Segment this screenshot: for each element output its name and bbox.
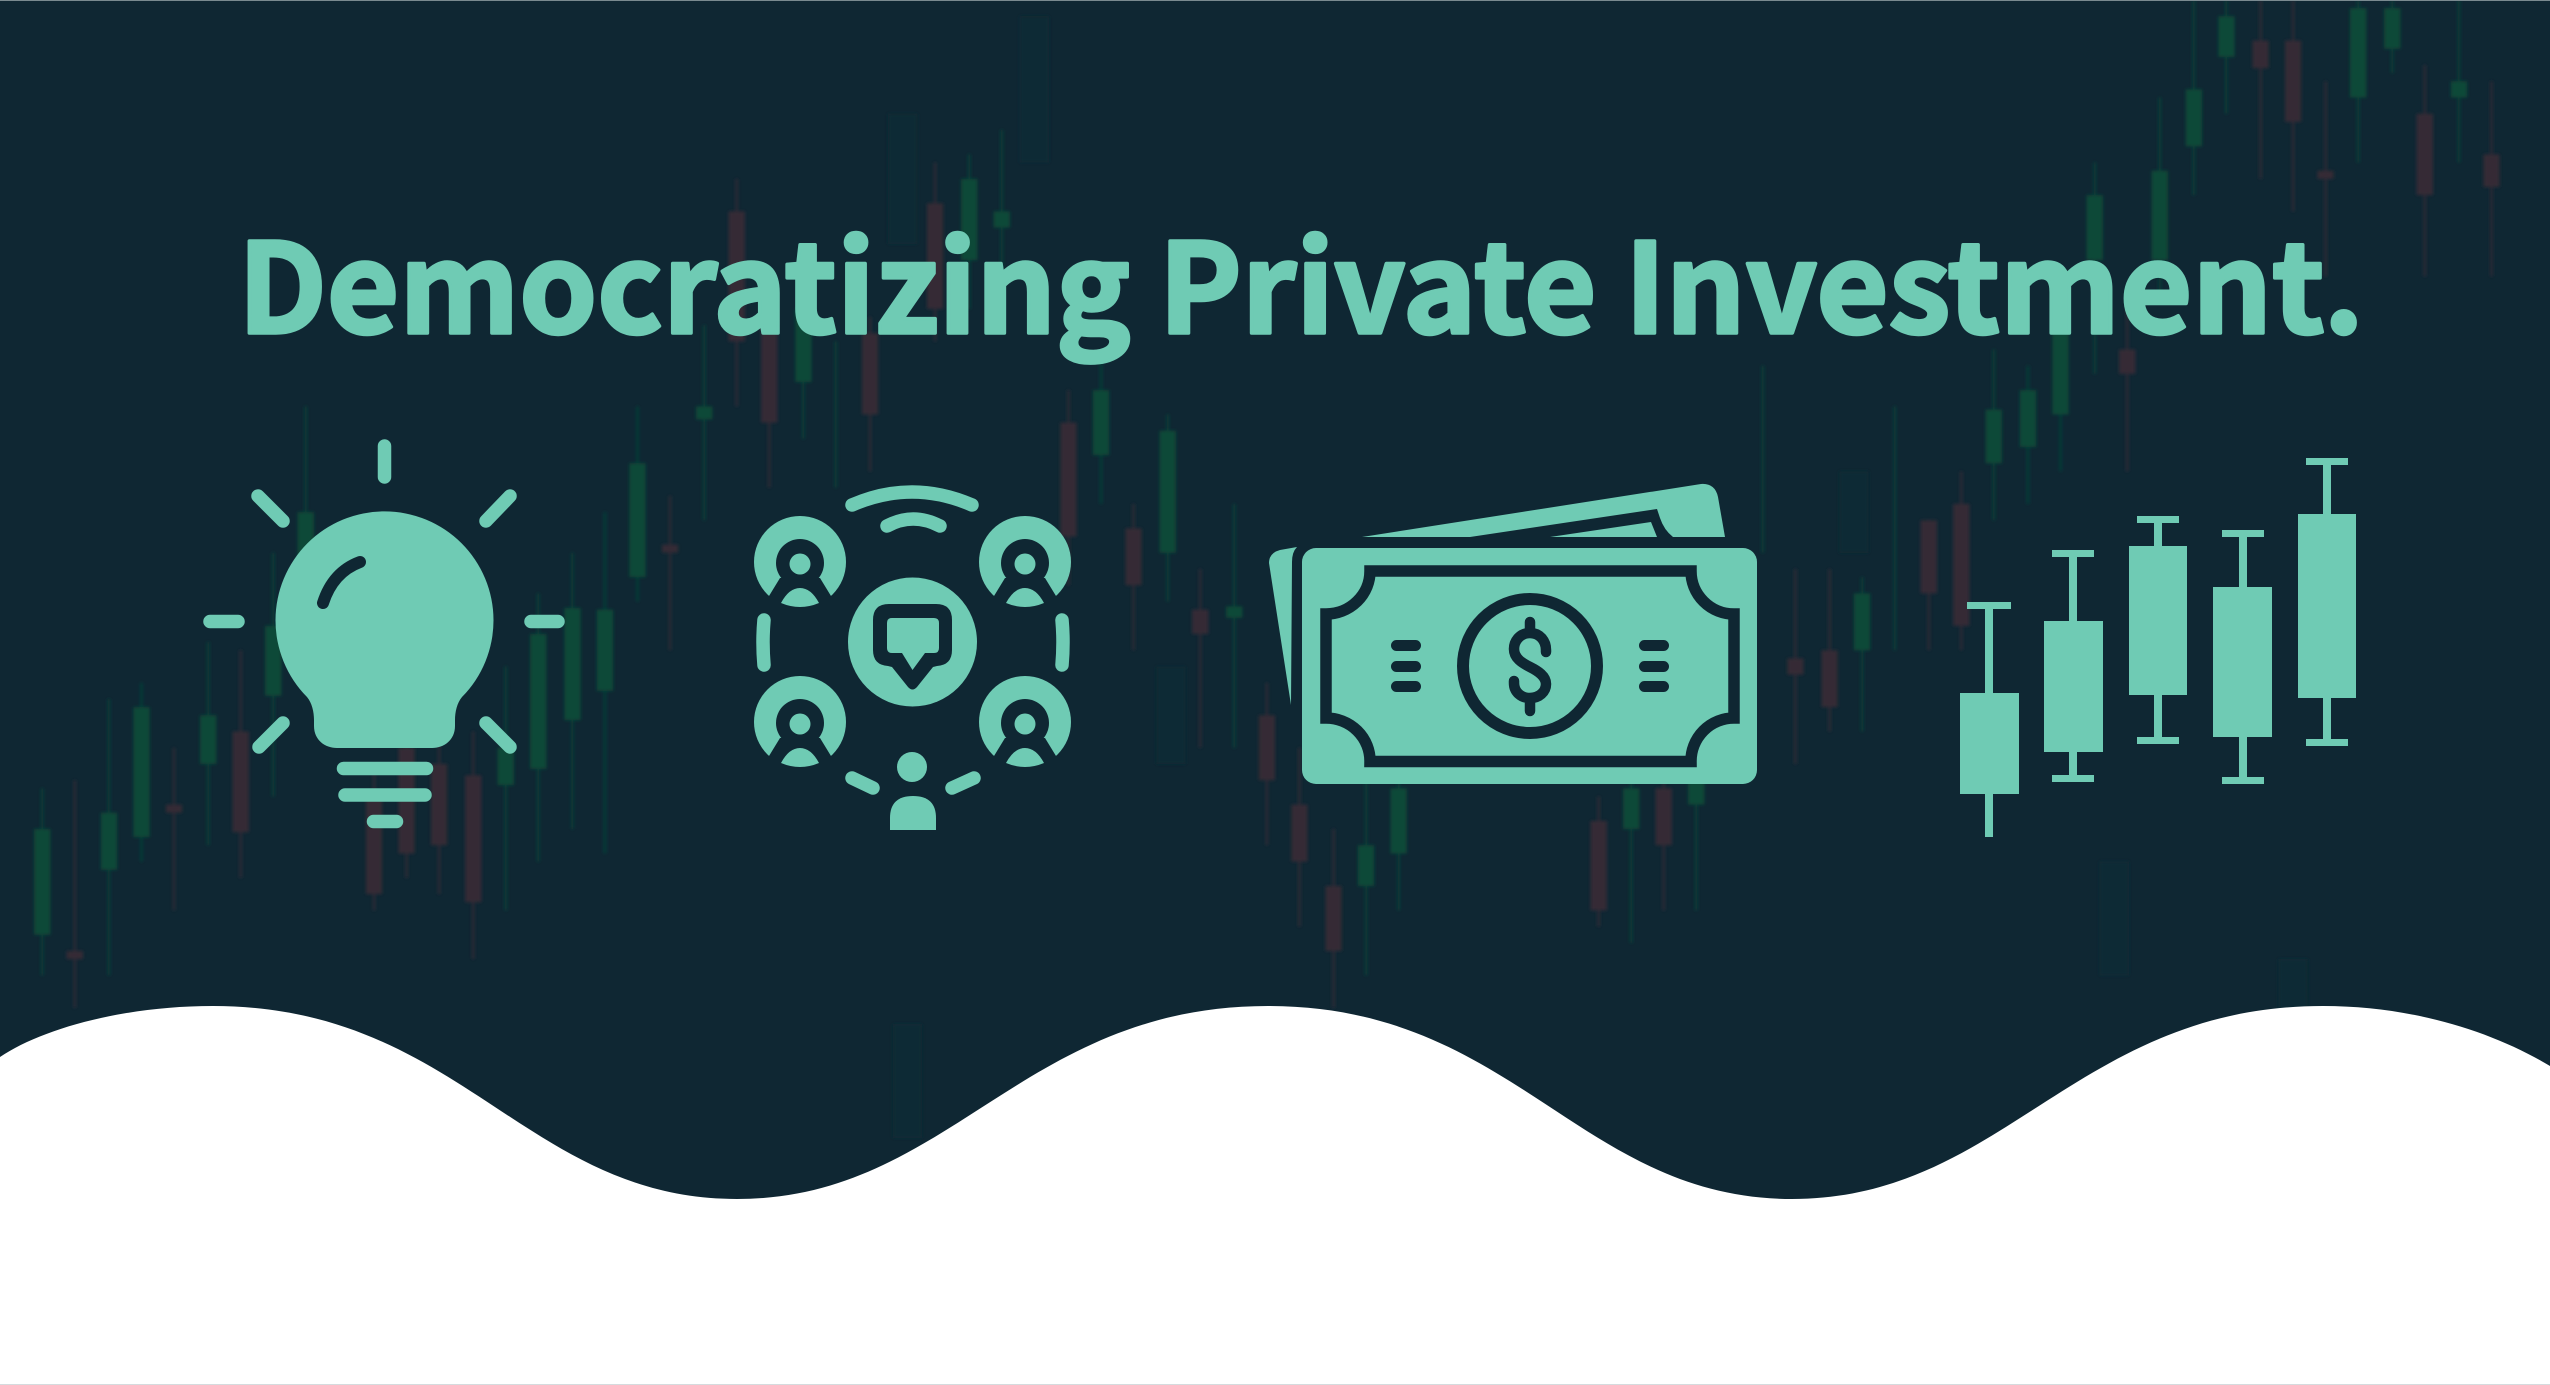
white wave [0,1006,2550,1385]
dollar sign [1514,622,1546,711]
bulb body [276,511,494,748]
bottom person [897,752,927,782]
connecting arcs [763,492,1063,788]
candle 5 [2298,458,2356,746]
bulb base [344,768,426,822]
candle 3 [2129,516,2187,744]
person top right [977,516,1073,610]
icon: community of people [752,492,1073,830]
bill frame [1326,571,1734,762]
candle 1 [1960,602,2019,837]
title: Democratizing Private Investment. [238,189,2364,369]
candle 2 [2044,550,2103,782]
front bill [1302,548,1757,784]
bulb highlight [323,562,360,603]
bulb rays [210,446,558,747]
back bill sliver [1269,547,1297,705]
bottom edge line [0,1384,2550,1385]
bill dashes left [1396,646,1416,686]
bill dashes right [1644,646,1664,686]
speech bubble outline [873,604,952,690]
center disc [848,578,977,706]
icon: banknotes [1269,484,1757,784]
speech bubble [887,618,939,670]
person bottom left [752,676,848,770]
icon: light bulb [210,446,558,822]
coin ring [1463,599,1597,733]
person top left [752,516,848,610]
background candlestick chart [42,0,2491,1138]
candle 4 [2213,530,2272,784]
back bill inner [1550,522,1657,537]
person bottom right [977,676,1073,770]
back bill top [1362,484,1725,537]
top edge line [0,0,2550,1]
icon: candlestick chart [1960,458,2356,837]
